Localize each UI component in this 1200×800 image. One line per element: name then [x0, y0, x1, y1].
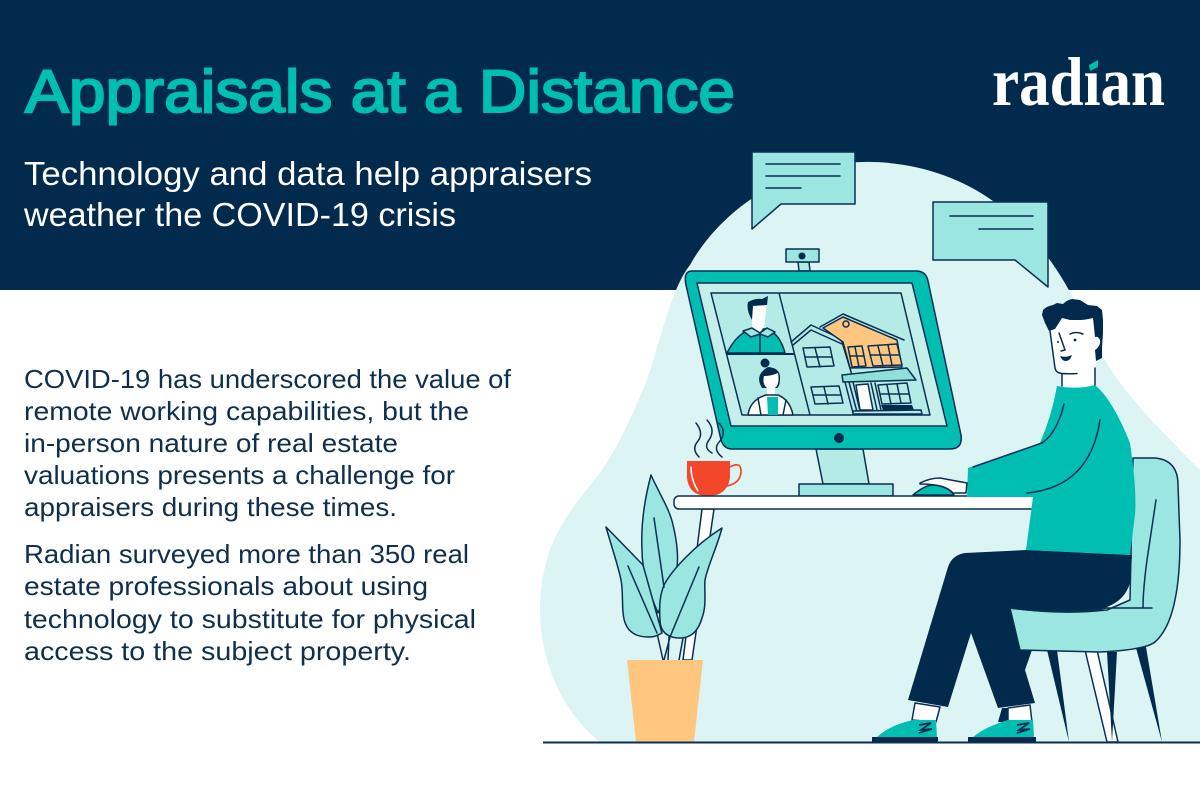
- webcam: [786, 249, 819, 271]
- house: [791, 314, 922, 414]
- steam: [695, 420, 723, 457]
- survey paragraph: Radian surveyed more than 350 real: [24, 539, 469, 569]
- survey paragraph: access to the subject property.: [24, 636, 411, 666]
- intro paragraph: remote working capabilities, but the: [24, 396, 469, 426]
- intro paragraph: [24, 364, 512, 522]
- neck and face: [1050, 318, 1100, 387]
- socks: [912, 703, 1032, 722]
- center leaf: [642, 475, 678, 613]
- background blob: [540, 162, 1200, 742]
- intro paragraph: valuations presents a challenge for: [24, 460, 455, 490]
- sweater: [967, 385, 1135, 555]
- man on video call: [727, 296, 785, 353]
- monitor: [685, 271, 961, 449]
- survey paragraph: estate professionals about using: [24, 571, 428, 601]
- screen dividers: [779, 293, 810, 415]
- title: Appraisals at a Distance: [25, 58, 735, 125]
- right leaf: [660, 528, 722, 638]
- hand and mouse: [920, 478, 967, 493]
- chair legs: [1047, 647, 1162, 742]
- monitor stand: [799, 449, 893, 496]
- subtitle: [23, 155, 592, 233]
- house windows: [803, 344, 911, 404]
- desk leg right: [1085, 650, 1118, 742]
- desk: [674, 496, 1044, 509]
- flower pot: [627, 660, 703, 742]
- subtitle: weather the COVID-19 crisis: [23, 196, 456, 233]
- intro paragraph: in-person nature of real estate: [24, 428, 398, 458]
- plant: [606, 475, 722, 742]
- radian logo: radian: [992, 44, 1165, 120]
- coffee cup: [687, 461, 741, 496]
- floor line: [543, 742, 1200, 744]
- person: [674, 299, 1180, 742]
- woman on video call: [748, 358, 793, 415]
- survey paragraph: technology to substitute for physical: [24, 604, 476, 634]
- intro paragraph: appraisers during these times.: [24, 492, 397, 522]
- intro paragraph: COVID-19 has underscored the value of: [24, 364, 512, 394]
- survey paragraph: [24, 539, 476, 666]
- hair: [1042, 299, 1103, 361]
- face details: [1059, 332, 1083, 351]
- desk leg left: [683, 509, 714, 660]
- trousers: [908, 550, 1132, 708]
- header band: [0, 0, 1200, 290]
- speech bubble left: [752, 152, 855, 229]
- chair: [1010, 458, 1180, 652]
- speech bubble right: [933, 202, 1048, 287]
- shoes: [877, 720, 1034, 737]
- subtitle: Technology and data help appraisers: [24, 155, 592, 192]
- left leaf: [606, 527, 662, 637]
